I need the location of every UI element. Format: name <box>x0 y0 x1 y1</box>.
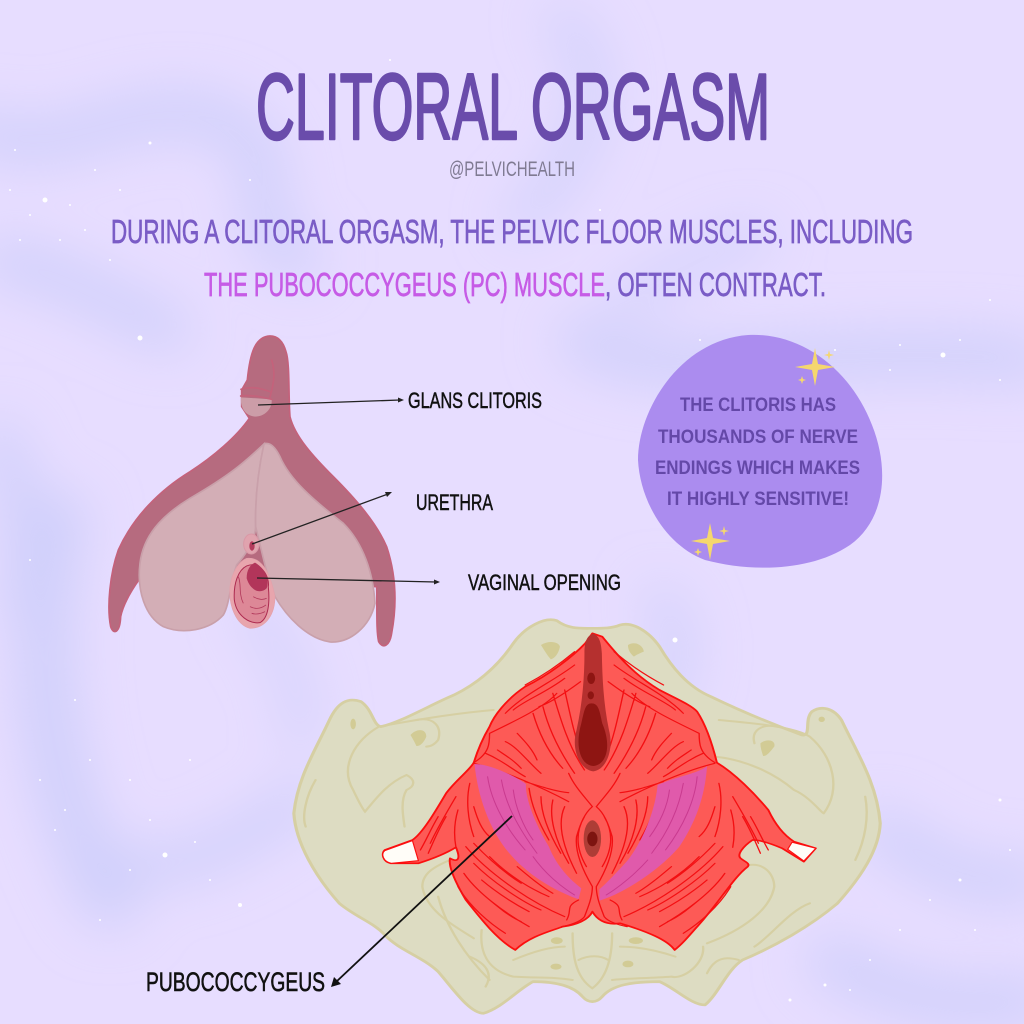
pubococcygeus muscle highlight <box>475 764 707 901</box>
callout: nerve endings <box>638 335 882 568</box>
muscle fibre lines <box>420 652 592 933</box>
glans fold lines <box>241 360 274 399</box>
callout text <box>655 394 860 510</box>
label: vaginal opening <box>257 570 621 595</box>
anal opening <box>584 820 601 857</box>
vaginal opening <box>230 558 275 628</box>
callout blob <box>638 335 882 568</box>
pelvis diagram <box>294 620 880 1013</box>
clitoris diagram <box>109 336 395 646</box>
icon: sparkles top <box>795 348 835 386</box>
label: vaginal opening: VAGINAL OPENING <box>468 570 621 595</box>
red pelvic floor muscles <box>383 633 816 950</box>
callout text: ENDINGS WHICH MAKES <box>655 457 860 479</box>
callout text: IT HIGHLY SENSITIVE! <box>667 488 849 510</box>
handle: @PELVICHEALTH <box>449 158 575 181</box>
label: glans clitoris: GLANS CLITORIS <box>408 388 542 413</box>
label: pubococcygeus: PUBOCOCCYGEUS <box>146 967 325 997</box>
label: pubococcygeus <box>146 816 512 997</box>
right bulb <box>256 443 375 642</box>
icon: white tendon tips <box>383 841 816 863</box>
glans <box>241 397 272 417</box>
urethra and vagina passage <box>575 633 611 771</box>
mirrored muscle fibre lines <box>596 652 768 933</box>
icon: sparkles bottom <box>691 523 730 560</box>
label: urethra: URETHRA <box>416 490 493 515</box>
label: urethra <box>252 490 493 544</box>
label: glans clitoris <box>258 388 542 413</box>
left bulb <box>139 444 264 631</box>
intro text <box>111 213 913 303</box>
urethra <box>244 534 259 554</box>
callout text: THOUSANDS OF NERVE <box>658 426 858 448</box>
callout text: THE CLITORIS HAS <box>680 394 836 416</box>
pelvic bone <box>294 620 880 1013</box>
intro text: THE PUBOCOCCYGEUS (PC) MUSCLE <box>204 266 605 303</box>
clitoral body and crura <box>109 336 395 646</box>
intro text: , OFTEN CONTRACT. <box>605 266 826 303</box>
